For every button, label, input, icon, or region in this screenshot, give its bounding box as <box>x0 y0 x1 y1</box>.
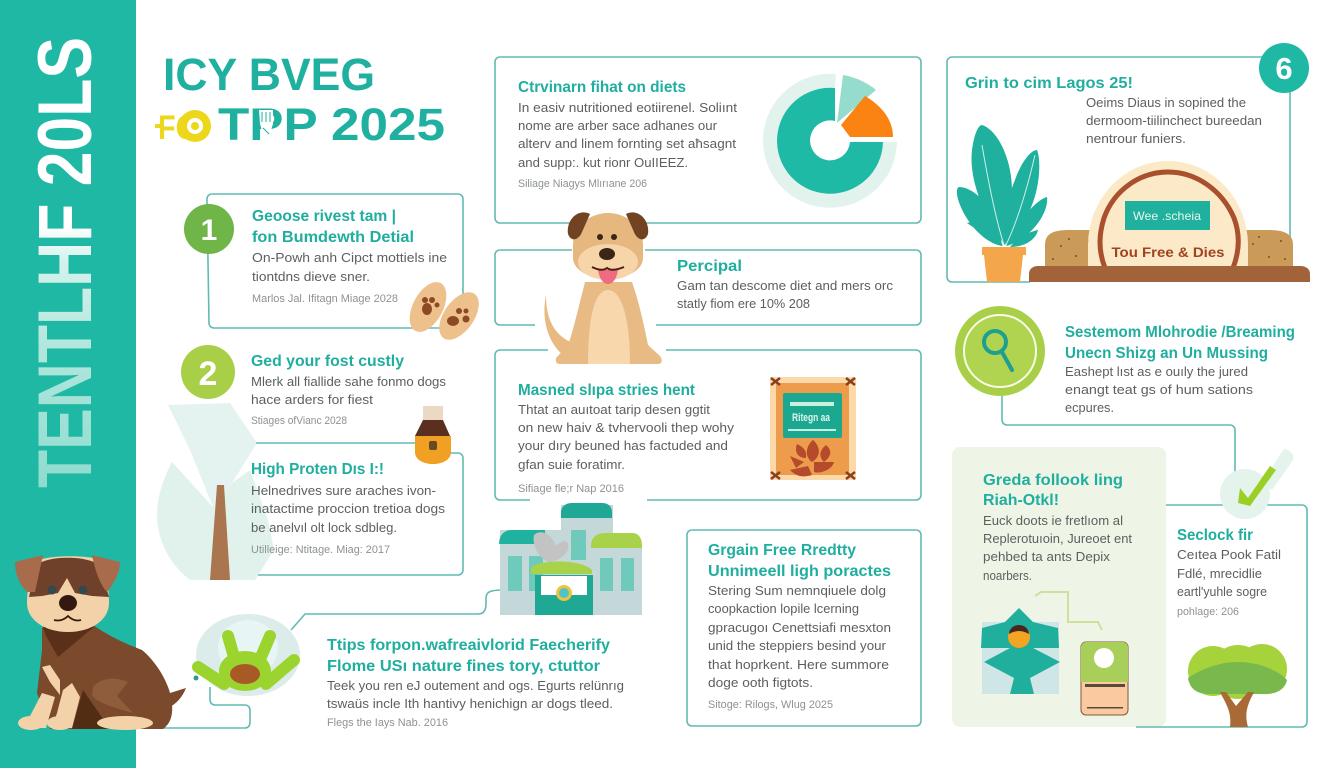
illustration: pale tree <box>157 403 274 580</box>
connector: magnifier to check <box>1002 396 1235 472</box>
badge: number 1: 1 <box>201 214 217 247</box>
text: masned body: your dıry beuned has factuded and <box>518 438 728 453</box>
panel: card 3 <box>251 406 463 575</box>
text: seclock body <box>1177 547 1281 618</box>
illustration: buildings <box>499 503 642 615</box>
text: tips body: Flegs the Iays Nab. 2016 <box>327 717 448 729</box>
text: green panel body: Euck doots ie fretlıom al <box>983 513 1123 528</box>
panel: masned <box>495 350 921 500</box>
illustration: bread badge <box>1029 161 1310 282</box>
heading: masned: Masned slıpa stries hent <box>518 382 696 399</box>
text: grain free body: gpracugoı Cenettsiafi mesxton <box>708 620 891 635</box>
badge: number 2: 2 <box>199 355 217 393</box>
illustration: bread badge: Tou Free & Dies <box>1112 244 1225 260</box>
panel: seclock <box>1136 449 1307 727</box>
heading: top right: Grin to cim Lagos 25! <box>965 75 1133 92</box>
panel: sustainable <box>1065 324 1295 415</box>
panel: card 1 <box>184 194 487 347</box>
text: green panel body <box>983 513 1132 583</box>
text: sustainable body <box>1065 364 1254 415</box>
connector: envelope to tag <box>1035 592 1102 630</box>
connector: bowl to buildings <box>291 590 503 630</box>
text: card 3 body <box>251 483 446 556</box>
text: card 1 body: Marlos Jal. Ifitagn Miage 2028 <box>252 293 398 305</box>
panel: percipal <box>495 250 921 325</box>
heading: card 2: Ged your fost custly <box>251 353 404 370</box>
text: diets body <box>518 100 737 190</box>
text: masned body: Sifiage fle;r Nap 2016 <box>518 483 624 495</box>
text: grain free body: Sitoge: Rilogs, Wlug 2025 <box>708 699 833 711</box>
illustration: tan dog <box>544 212 662 364</box>
icon: envelope with figure <box>981 608 1060 694</box>
text: card 1 body: tiontdns dieve sner. <box>252 269 370 284</box>
text: percipal body: statly fiom ere 10% 208 <box>677 296 810 311</box>
text: masned body: on new haiv & tvhervooli thep wohy <box>518 420 735 435</box>
text: masned body: Thtat an auıtoat tarip desen ggtit <box>518 402 710 417</box>
icon: magnifier badge <box>955 306 1045 396</box>
heading: tips: Ttips forpon.wafreaivlorid Faecherify <box>327 637 610 654</box>
text: card 2 body: hace arders for fiest <box>251 392 373 407</box>
illustration: brown puppy <box>15 555 186 730</box>
text: percipal body: Gam tan descome diet and mers orc <box>677 278 894 293</box>
text: grain free body: that hoprkent. Here summore <box>708 657 889 672</box>
icon: orange bottle <box>415 406 451 464</box>
text: card 2 body <box>251 374 446 427</box>
text: grain free body: coopkaction lopile lcerning <box>708 601 859 616</box>
heading: seclock: Seclock ﬁr <box>1177 527 1253 544</box>
text: card 1 body: On-Powh anh Cipct mottiels ine <box>252 250 447 265</box>
panel: top right <box>947 43 1310 282</box>
text: diets body: nome are arber sace adhanes our <box>518 118 718 133</box>
badge: number 6: 6 <box>1275 51 1293 86</box>
chart: donut <box>763 74 897 208</box>
icon: tree <box>1188 644 1287 727</box>
text: tips body: Teek you ren eJ outement and ogs. Egurts relünrıg <box>327 678 624 693</box>
text: percipal body <box>677 278 894 311</box>
sidebar <box>0 0 136 768</box>
text: seclock body: pohlage: 206 <box>1177 606 1239 618</box>
title: ICY BVEG <box>163 49 375 100</box>
title <box>155 49 445 150</box>
panel: sustainable: Unecn Shizg an Un Mussing <box>1065 345 1268 362</box>
text: diets body: In easiv nutritioned eotiirenel. Soliınt <box>518 100 737 115</box>
text: tips body: tswaüs incle Ith hantivy henichign ar dogs tleed. <box>327 696 613 711</box>
badge: number 2 <box>181 345 235 399</box>
text: seclock body: Ceıtea Pook Fatil <box>1177 547 1281 562</box>
icon: food package <box>770 377 856 480</box>
text: grain free body: unid the steppiers besind your <box>708 638 887 653</box>
illustration: bread badge: Wee .scheia <box>1133 209 1201 223</box>
text: card 3 body: Helnedrives sure araches ivon- <box>251 483 436 498</box>
badge: number 1 <box>184 204 234 254</box>
text: card 3 body: inatactime proccion tretioa dogs <box>251 501 446 516</box>
text: card 2 body: Stiages ofVianc 2028 <box>251 415 347 427</box>
text: tips body <box>327 678 624 729</box>
icon: food package: Ritegn aa <box>792 412 831 424</box>
text: top right body: Oeims Diaus in sopined the <box>1086 95 1246 110</box>
text: masned body <box>518 402 735 495</box>
text: card 1 body <box>252 250 447 305</box>
heading: card 1: Geoose rivest tam | <box>252 208 396 225</box>
text: grain free body: Stering Sum nemnqiuele dolg <box>708 583 886 598</box>
text: card 3 body: Utilleige: Ntitage. Miag: 2017 <box>251 544 390 556</box>
panel: card 2 <box>181 345 446 427</box>
title: TPP 2025 <box>218 99 445 150</box>
text: green panel body: Replerotuıoin, Jureoet ent <box>983 531 1132 546</box>
text: top right body <box>1086 95 1262 146</box>
title: FO <box>158 109 198 147</box>
panel: green follow-up <box>952 447 1166 727</box>
text: seclock body: Fdlé, mrecidlie <box>1177 566 1262 581</box>
connector: bowl to puppy <box>160 687 250 728</box>
text: card 2 body: Mlerk all fiallide sahe fonmo dogs <box>251 374 446 389</box>
heading: green panel: Greda follook ling <box>983 472 1123 489</box>
icon: green bowl <box>194 614 300 696</box>
panel: grain free <box>687 530 921 726</box>
text: grain free body: doge ooth figtots. <box>708 675 813 690</box>
text: diets body: Siliage Niagys Mlırıane 206 <box>518 178 647 190</box>
text: masned body: gfan suie foratimr. <box>518 457 625 472</box>
panel: grain free: Unnimeell ligh poractes <box>708 563 891 580</box>
text: green panel body: noarbers. <box>983 568 1032 583</box>
text: green panel body: pehbed ta ants Depix <box>983 549 1111 564</box>
icon: plant <box>957 125 1047 282</box>
heading: card 3: High Proten Dıs I:! <box>251 461 384 478</box>
text: grain free body <box>708 583 891 711</box>
icon: paw pads <box>402 276 487 347</box>
icon: check mark <box>1220 449 1293 519</box>
text: diets body: alterv and linem fornting set aħsagnt <box>518 136 736 151</box>
text: sustainable body: Eashept lıst as e ouıly the jured <box>1065 364 1248 379</box>
heading: grain free: Grgain Free Rredtty <box>708 542 856 559</box>
heading: diets: Ctrvinarn fihat on diets <box>518 79 686 96</box>
text: top right body: nentrour funiers. <box>1086 131 1186 146</box>
text: card 3 body: be anelvıl olt lock sdbleg. <box>251 520 397 535</box>
panel: card 1: fon Bumdewth Detial <box>252 229 414 246</box>
heading: percipal: Percipal <box>677 258 742 275</box>
badge: number 6 <box>1259 43 1309 93</box>
icon: food tag <box>1081 642 1128 715</box>
text: sustainable body: enangt teat gs of hum sations <box>1065 382 1254 397</box>
text: seclock body: eartl'yuhle sogre <box>1177 584 1267 599</box>
heading: sustainable: Sestemom Mlohrodie /Breaming <box>1065 324 1295 341</box>
panel: tips: Flome USı nature fines tory, ctuttor <box>327 658 600 675</box>
text: top right body: dermoom-tiilinchect bureedan <box>1086 113 1262 128</box>
panel: green follow-up: Riah-Otkl! <box>983 492 1059 509</box>
panel: tips <box>327 637 624 729</box>
panel: diets with pie <box>495 57 921 223</box>
text: diets body: and supp:. kut rionr OuIIEEZ. <box>518 155 688 170</box>
text: sustainable body: ecpures. <box>1065 400 1114 415</box>
